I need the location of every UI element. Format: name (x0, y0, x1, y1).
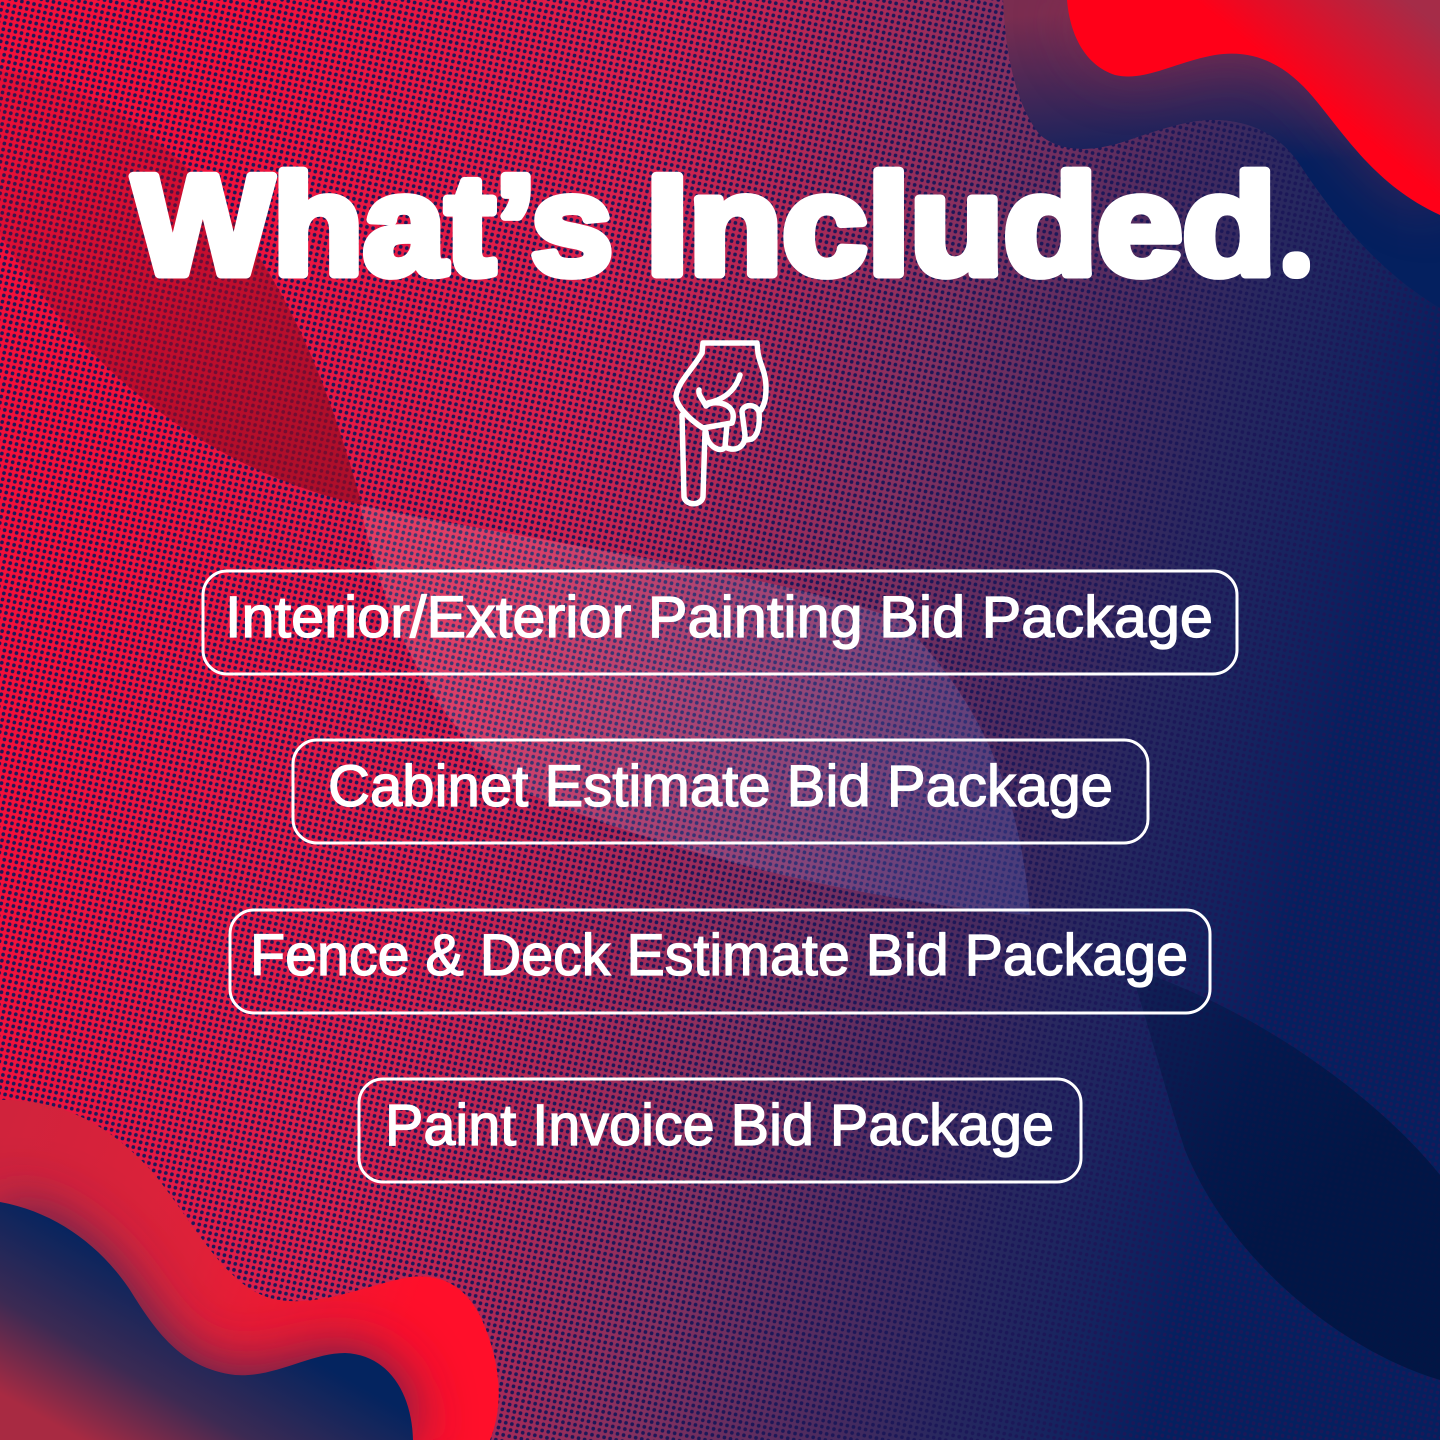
inner red wave (1067, 0, 1440, 215)
item 3 (230, 910, 1210, 1013)
title: Included (646, 146, 1276, 305)
item 3: Fence & Deck Estimate Bid Package (250, 923, 1188, 988)
top right corner waves (1003, 0, 1440, 308)
background shape: light leaf (360, 505, 1030, 915)
background shape: dark navy wave (1130, 968, 1440, 1380)
item 4: Paint Invoice Bid Package (385, 1093, 1054, 1158)
inner navy wave (0, 1202, 413, 1440)
title (133, 146, 1300, 305)
title: What’s (133, 146, 613, 305)
icon: hand pointing down (676, 343, 766, 504)
title: . (1293, 246, 1300, 273)
outer red wave (0, 1090, 510, 1440)
item 1: Interior/Exterior Painting Bid Package (225, 585, 1213, 650)
background shape: dark red leaf (0, 70, 362, 505)
item 2: Cabinet Estimate Bid Package (328, 754, 1113, 819)
outer navy wave (1003, 0, 1440, 308)
bottom left corner waves (0, 1090, 510, 1440)
item 1 (203, 571, 1237, 674)
item 4 (359, 1079, 1081, 1182)
item 2 (293, 740, 1148, 843)
